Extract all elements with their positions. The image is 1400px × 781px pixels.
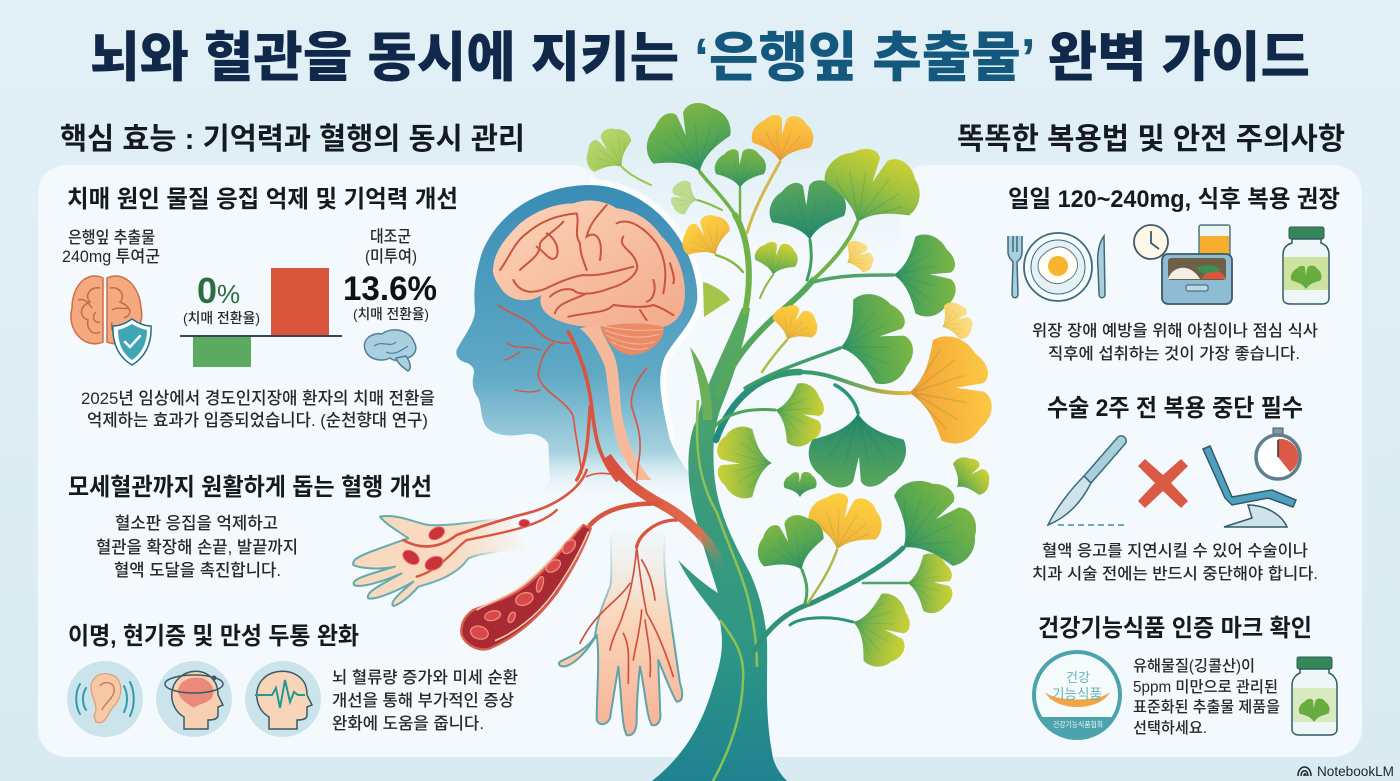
head arteries: [498, 305, 647, 480]
body text: 2025년 임상에서 경도인지장애 환자의 치매 전환을: [81, 389, 435, 408]
chart axis: [180, 335, 342, 337]
subheading: 치매 원인 물질 응집 억제 및 기억력 개선: [67, 186, 458, 213]
body text: 위장 장애 예방을 위해 아침이나 점심 식사: [1032, 322, 1318, 340]
icon: dizziness: [156, 661, 232, 737]
treated group label: 240mg 투여군: [62, 247, 160, 266]
value: 0%: 0%: [197, 270, 240, 311]
treated group label: 은행잎 추출물: [68, 228, 155, 247]
leaf: half green: [703, 282, 730, 317]
leaf: small yellow middle: [766, 298, 823, 350]
control group label: [365, 227, 417, 266]
body text: 직후에 섭취하는 것이 가장 좋습니다.: [1048, 345, 1300, 363]
icon: certification mark: [1030, 652, 1124, 747]
icon: lunch box: [1162, 254, 1232, 304]
body text: 완화에 도움을 줍니다.: [332, 714, 484, 733]
body text: 뇌 혈류량 증가와 미세 순환: [332, 668, 518, 687]
body text: [1032, 322, 1318, 363]
section: dosage: [1008, 186, 1340, 363]
icon: knife: [1098, 236, 1105, 298]
body text: 5ppm 미만으로 관리된: [1133, 678, 1278, 696]
leaf: pale green top left: [577, 120, 642, 183]
leaf: yellow lower: [802, 486, 888, 560]
branches: [622, 162, 908, 650]
caption: treated: (치매 전환율): [183, 310, 260, 326]
icon: brain with shield: [71, 276, 151, 365]
leaf: faded green: [669, 179, 700, 216]
illustration: arms, vessel and hands: [353, 457, 723, 735]
leaf: green right: [893, 235, 956, 317]
section: dementia: [62, 186, 458, 430]
artery branches: [403, 470, 677, 683]
body text: 선택하세요.: [1133, 719, 1207, 737]
cerebellum folds: [603, 326, 663, 349]
bar: treated: [193, 337, 251, 367]
leaf: orange top: [750, 113, 815, 165]
leaf: large green top: [637, 94, 741, 187]
body text: [81, 389, 435, 430]
leaf: yellow-green lower: [769, 379, 828, 450]
trunk: [652, 308, 787, 781]
body text: 혈소판 응집을 억제하고: [115, 514, 278, 533]
panel: centre: [560, 250, 960, 757]
leaf: floating yellow-green: [943, 450, 996, 504]
side spur: [690, 347, 712, 420]
lower hand: [559, 530, 682, 735]
left hand: [353, 516, 528, 606]
icon: certification mark: 기능식품: [1052, 686, 1102, 702]
icon: certification mark: 건강: [1066, 670, 1090, 685]
body text: 억제하는 효과가 입증되었습니다. (순천향대 연구): [87, 411, 428, 430]
cerebellum: [600, 322, 664, 355]
body text: 혈관을 확장해 손끝, 발끝까지: [96, 538, 298, 557]
artery to tree: [607, 457, 723, 570]
body text: [1032, 542, 1318, 583]
body text: [1133, 657, 1280, 737]
subheading: 일일 120~240mg, 식후 복용 권장: [1008, 186, 1340, 213]
leaf: green lower left: [748, 507, 834, 585]
panel: left: [38, 165, 600, 757]
body text: 표준화된 추출물 제품을: [1133, 698, 1280, 716]
illustration: tree: [577, 94, 996, 781]
brain folds: [500, 205, 674, 320]
bar: control: [271, 268, 329, 335]
subheading: 이명, 현기증 및 만성 두통 완화: [68, 623, 359, 650]
icon: clock: [1134, 225, 1168, 259]
icon: bottle: [1292, 657, 1337, 735]
panel: centre fade: [560, 150, 960, 250]
subheading: 모세혈관까지 원활하게 돕는 혈행 개선: [68, 474, 432, 501]
body text: 유해물질(깅콜산)이: [1133, 657, 1255, 675]
trunk stripes: [697, 400, 757, 781]
leaf: tiny green: [784, 472, 817, 497]
control group label: (미투여): [365, 247, 417, 266]
icon: juice glass: [1199, 225, 1230, 260]
icon: red cross: [1138, 459, 1188, 508]
body text: 혈액 도달을 촉진합니다.: [114, 561, 281, 580]
treated group label: [62, 228, 160, 266]
leaf: small yellow-green: [752, 239, 800, 279]
icon: certification mark: 건강기능식품협회: [1053, 719, 1103, 729]
leaf: pale yellow: [839, 236, 878, 278]
head halo: [590, 185, 697, 440]
section: tinnitus and headache: [67, 623, 518, 737]
control group label: 대조군: [370, 227, 411, 246]
leaf: large orange: [903, 333, 995, 447]
icon: dental chair: [1203, 446, 1296, 527]
subheading: 수술 2주 전 복용 중단 필수: [1047, 395, 1303, 422]
section: certification: [1030, 615, 1337, 747]
icon: ear: [67, 661, 143, 737]
caption: control: (치매 전환율): [353, 306, 429, 322]
bar chart: conversion rates: [180, 268, 437, 367]
icon: fork: [1008, 236, 1022, 298]
section: circulation: [68, 474, 432, 580]
leaf: large green lower right: [872, 463, 992, 586]
title: 뇌와 혈관을 동시에 지키는 ‘은행잎 추출물’ 완벽 가이드: [90, 28, 1310, 88]
value: 13.6%: 13.6%: [343, 270, 437, 308]
vessel rim: [477, 527, 588, 641]
left hand blood cells: [400, 519, 530, 573]
leaf: large green middle: [828, 286, 920, 393]
vessel blood cells: [469, 537, 578, 641]
subheading: 건강기능식품 인증 마크 확인: [1038, 615, 1312, 642]
icon: supplement bottle: [1283, 227, 1329, 304]
head silhouette: [456, 185, 700, 500]
illustration: head and brain: [456, 185, 700, 500]
icon: small blue brain: [364, 330, 416, 371]
icon: plate with egg: [1024, 233, 1092, 301]
section: surgery: [1032, 395, 1318, 583]
body text: [332, 668, 518, 733]
icon: scalpel: [1048, 436, 1128, 525]
body text: [96, 514, 298, 580]
leaf: large yellow-green: [812, 136, 931, 241]
leaf: pale orange: [934, 297, 977, 345]
leaf: dark green: [767, 178, 849, 243]
leaf: small lower right: [907, 554, 952, 613]
icon: headache: [245, 661, 321, 737]
leaf: yellow left: [675, 208, 738, 268]
brain: [493, 201, 685, 327]
leaf: bottom yellow-green: [843, 587, 917, 673]
panel: right: [900, 165, 1362, 757]
leaf: yellow-green left: [717, 427, 772, 498]
heading: key effects: 핵심 효능 : 기억력과 혈행의 동시 관리: [60, 123, 525, 156]
spinal cord: [580, 323, 652, 480]
leaf: dark green downward: [809, 413, 906, 487]
body text: 혈액 응고를 지연시킬 수 있어 수술이나: [1042, 542, 1308, 560]
leaf: small green: [715, 149, 766, 188]
body text: 개선을 통해 부가적인 증상: [332, 691, 514, 710]
heading: dosage and safety: 똑똑한 복용법 및 안전 주의사항: [957, 123, 1345, 156]
body text: 치과 시술 전에는 반드시 중단해야 합니다.: [1032, 565, 1318, 583]
icon: stopwatch: [1256, 428, 1300, 479]
blood vessel: [461, 525, 591, 649]
logo: NotebookLM: NotebookLM: [1317, 763, 1394, 779]
